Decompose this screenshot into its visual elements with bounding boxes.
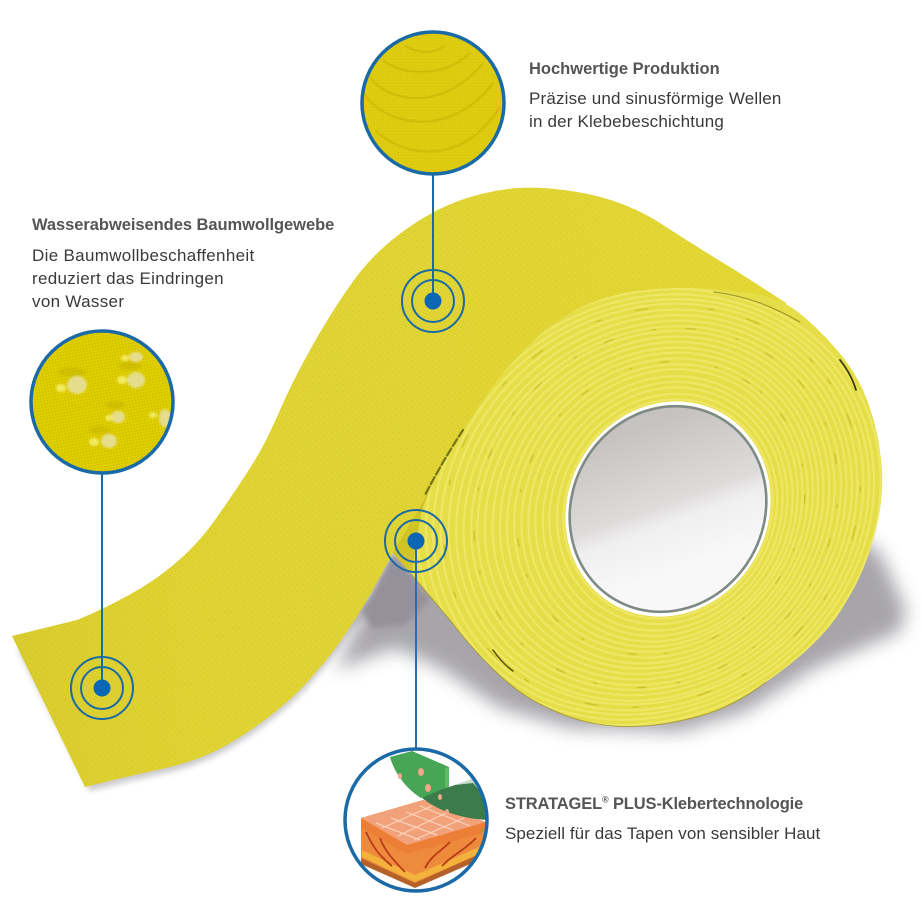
text: Wasserabweisendes Baumwollgewebe: Die Baumwollbeschaffenheit (32, 246, 255, 265)
marker: left target (71, 657, 133, 719)
callout: bottom circle, skin illustration (345, 541, 487, 891)
speckled dark winding gaps (444, 308, 861, 708)
text: Wasserabweisendes Baumwollgewebe: reduziert das Eindringen (32, 269, 224, 288)
fold between strip and roll (393, 490, 440, 585)
roll core hole (526, 364, 810, 654)
text: Wasserabweisendes Baumwollgewebe (32, 216, 334, 311)
marker: center target (385, 510, 447, 572)
text: Hochwertige Produktion: Präzise und sinusförmige Wellen (529, 89, 782, 108)
skin block (361, 800, 486, 888)
tape strip (12, 188, 786, 787)
roll windings (417, 288, 882, 726)
callout: left circle, water drops (31, 331, 173, 688)
text: Hochwertige Produktion (529, 60, 782, 131)
text: Wasserabweisendes Baumwollgewebe: Wasserabweisendes Baumwollgewebe (32, 216, 334, 234)
text: STRATAGEL PLUS-Klebertechnologie: STRATAGEL® PLUS-Klebertechnologie (505, 794, 803, 813)
tape roll (412, 288, 882, 728)
text: STRATAGEL PLUS-Klebertechnologie: Speziell für das Tapen von sensibler Haut (505, 824, 820, 843)
text: Hochwertige Produktion: Hochwertige Produktion (529, 60, 720, 78)
green gel strip (390, 751, 487, 820)
dark winding cracks (412, 292, 856, 727)
marker: top target (402, 270, 464, 332)
text: Wasserabweisendes Baumwollgewebe: von Wasser (32, 292, 124, 311)
ground shadow (18, 500, 906, 791)
text: STRATAGEL PLUS-Klebertechnologie (505, 794, 820, 843)
callout: top circle, Hochwertige Produktion (362, 32, 504, 300)
water droplets (56, 352, 171, 448)
text: Hochwertige Produktion: in der Klebebeschichtung (529, 112, 724, 131)
